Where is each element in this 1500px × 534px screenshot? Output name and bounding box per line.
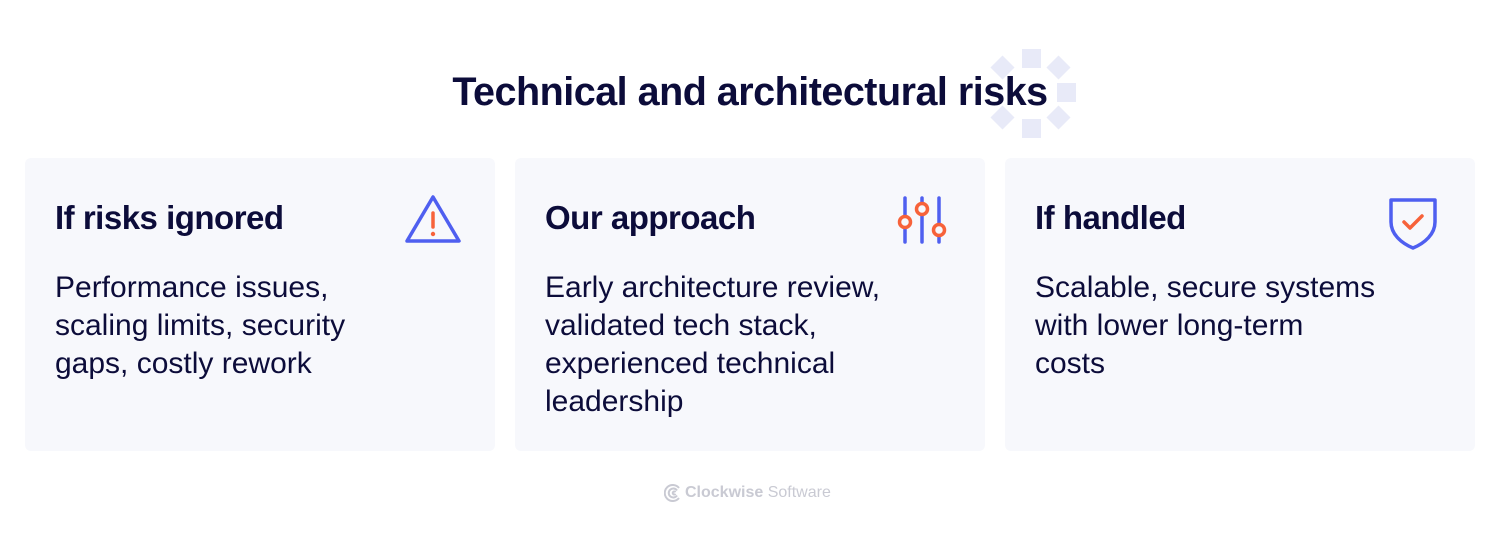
body text <box>545 271 880 418</box>
body text: leadership <box>545 385 683 418</box>
body text: scaling limits, security <box>55 309 345 342</box>
body text: Early architecture review, <box>545 271 880 304</box>
heading: If risks ignored <box>55 199 284 236</box>
body text <box>55 271 345 380</box>
icon: warning triangle <box>405 195 461 243</box>
body text: Performance issues, <box>55 271 328 304</box>
decoration: squares behind title <box>990 49 1076 138</box>
panel: if risks ignored <box>25 158 495 451</box>
title: Technical and architectural risks <box>452 70 1048 114</box>
body text: costs <box>1035 347 1105 380</box>
body text: Scalable, secure systems <box>1035 271 1375 304</box>
body text: gaps, costly rework <box>55 347 312 380</box>
footer logo <box>664 484 831 502</box>
icon: logo mark <box>664 484 680 502</box>
icon: sliders <box>898 196 946 244</box>
footer logo: Software <box>768 484 831 501</box>
heading: Our approach <box>545 199 755 236</box>
heading: If handled <box>1035 199 1186 236</box>
panel: if handled <box>1005 158 1475 451</box>
footer logo: Clockwise <box>685 484 763 501</box>
body text: experienced technical <box>545 347 835 380</box>
body text: validated tech stack, <box>545 309 817 342</box>
icon: shield check <box>1389 198 1437 250</box>
body text <box>1035 271 1375 380</box>
panel: our approach <box>515 158 985 451</box>
body text: with lower long-term <box>1035 309 1303 342</box>
